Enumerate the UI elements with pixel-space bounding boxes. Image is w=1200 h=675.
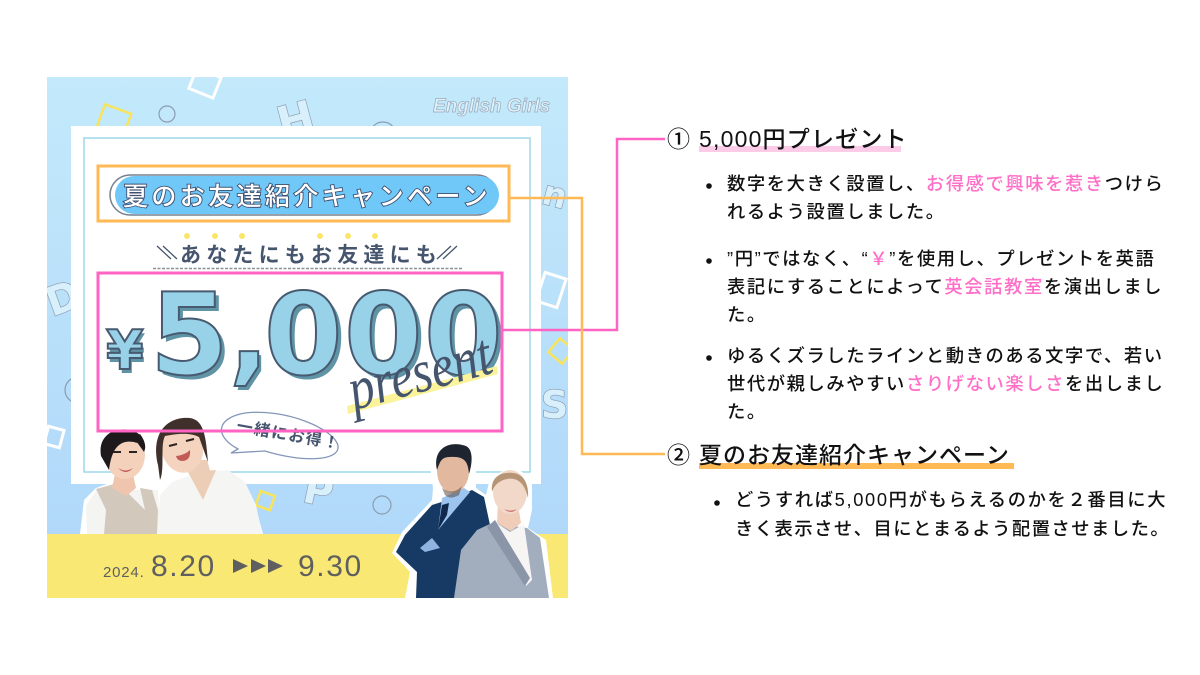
background decorations: S: [541, 383, 568, 427]
amount: yen 5,000: 0: [424, 269, 503, 401]
amount: yen 5,000: ,: [232, 278, 272, 400]
campaign title pill: [110, 175, 499, 215]
amount: yen 5,000: ¥: [106, 319, 144, 382]
campaign dates: 8.20: [151, 550, 216, 583]
heading 2: [667, 436, 1014, 470]
text: bullets for point 1: れるよう設置しました。: [727, 201, 946, 222]
white cutout outline: [392, 440, 553, 598]
photo: two women: [80, 412, 263, 534]
campaign dates: 2024.: [103, 564, 145, 581]
text: bullets for point 2: きく表示させ、目にとまるよう配置させました。: [735, 518, 1170, 539]
background decorations: P: [299, 466, 337, 517]
text: bullets for point 1: [706, 173, 1164, 422]
yellow accent stripe: [347, 366, 498, 414]
heading 1: [667, 120, 908, 154]
heading 1: ①: [667, 120, 690, 154]
white card: [71, 126, 541, 484]
speech bubble: 一緒にお得！: [235, 417, 342, 453]
highlight box: title: [98, 166, 509, 221]
amount: yen 5,000: ,: [229, 274, 269, 396]
text: bullets for point 1: 表記にすることによって英会話教室を演出しまし: [727, 276, 1163, 297]
text: bullets for point 1: 数字を大きく設置し、お得感で興味を惹きつけら: [727, 173, 1164, 194]
card inner border: [84, 138, 530, 472]
amount: yen 5,000: 0: [344, 269, 423, 401]
text: bullets for point 1: ”円”ではなく、“￥”を使用し、プレゼントを英語: [727, 248, 1155, 269]
campaign dates: 9.30: [298, 550, 363, 583]
subheading: [153, 233, 463, 268]
amount: yen 5,000: [106, 269, 507, 405]
panel: campaign poster: [40, 68, 574, 598]
speech bubble: [221, 412, 342, 459]
woman in suit: [454, 470, 549, 598]
photo: man and woman in suits: [392, 440, 553, 598]
amount: yen 5,000: 0: [428, 273, 507, 405]
present script: present: [337, 321, 499, 423]
heading 2: 夏のお友達紹介キャンペーン: [699, 442, 1010, 468]
amount: yen 5,000: ¥: [108, 323, 146, 386]
text: bullets for point 1: ゆるくズラしたラインと動きのある文字で、若い: [727, 345, 1164, 366]
amount: yen 5,000: 0: [264, 269, 343, 401]
amount: yen 5,000: 0: [268, 273, 347, 405]
brand name: English Girls: [433, 96, 550, 117]
text: bullets for point 1: た。: [727, 401, 767, 422]
highlight box: amount: [98, 273, 502, 431]
amount: yen 5,000: 0: [348, 273, 427, 405]
text: bullets for point 1: た。: [727, 304, 767, 325]
connector: title to point 2: [510, 198, 665, 454]
man: [396, 444, 490, 598]
text: bullets for point 1: 世代が親しみやすいさりげない楽しさを出しまし: [727, 373, 1164, 394]
connector: amount to point 1: [502, 139, 665, 330]
text: bullets for point 2: [714, 489, 1170, 539]
text: bullets for point 2: どうすれば5,000円がもらえるのかを２番目に大: [735, 489, 1167, 510]
campaign dates: [103, 550, 363, 583]
background decorations: D: [40, 272, 87, 326]
amount: yen 5,000: 5: [150, 269, 229, 401]
left woman: [86, 429, 160, 534]
amount: yen 5,000: 5: [154, 273, 233, 405]
background decorations: n: [538, 173, 572, 218]
white cutout outline: [80, 412, 263, 534]
right woman: [156, 417, 262, 534]
heading 2: ②: [667, 436, 690, 470]
background decorations: H: [271, 91, 320, 150]
campaign title pill: 夏のお友達紹介キャンペーン: [123, 183, 491, 211]
poster background: [47, 77, 568, 598]
background decorations: [40, 68, 574, 517]
yellow date band: [47, 534, 568, 598]
subheading: あなたにもお友達にも: [180, 244, 442, 267]
heading 1: 5,000円プレゼント: [699, 126, 908, 152]
